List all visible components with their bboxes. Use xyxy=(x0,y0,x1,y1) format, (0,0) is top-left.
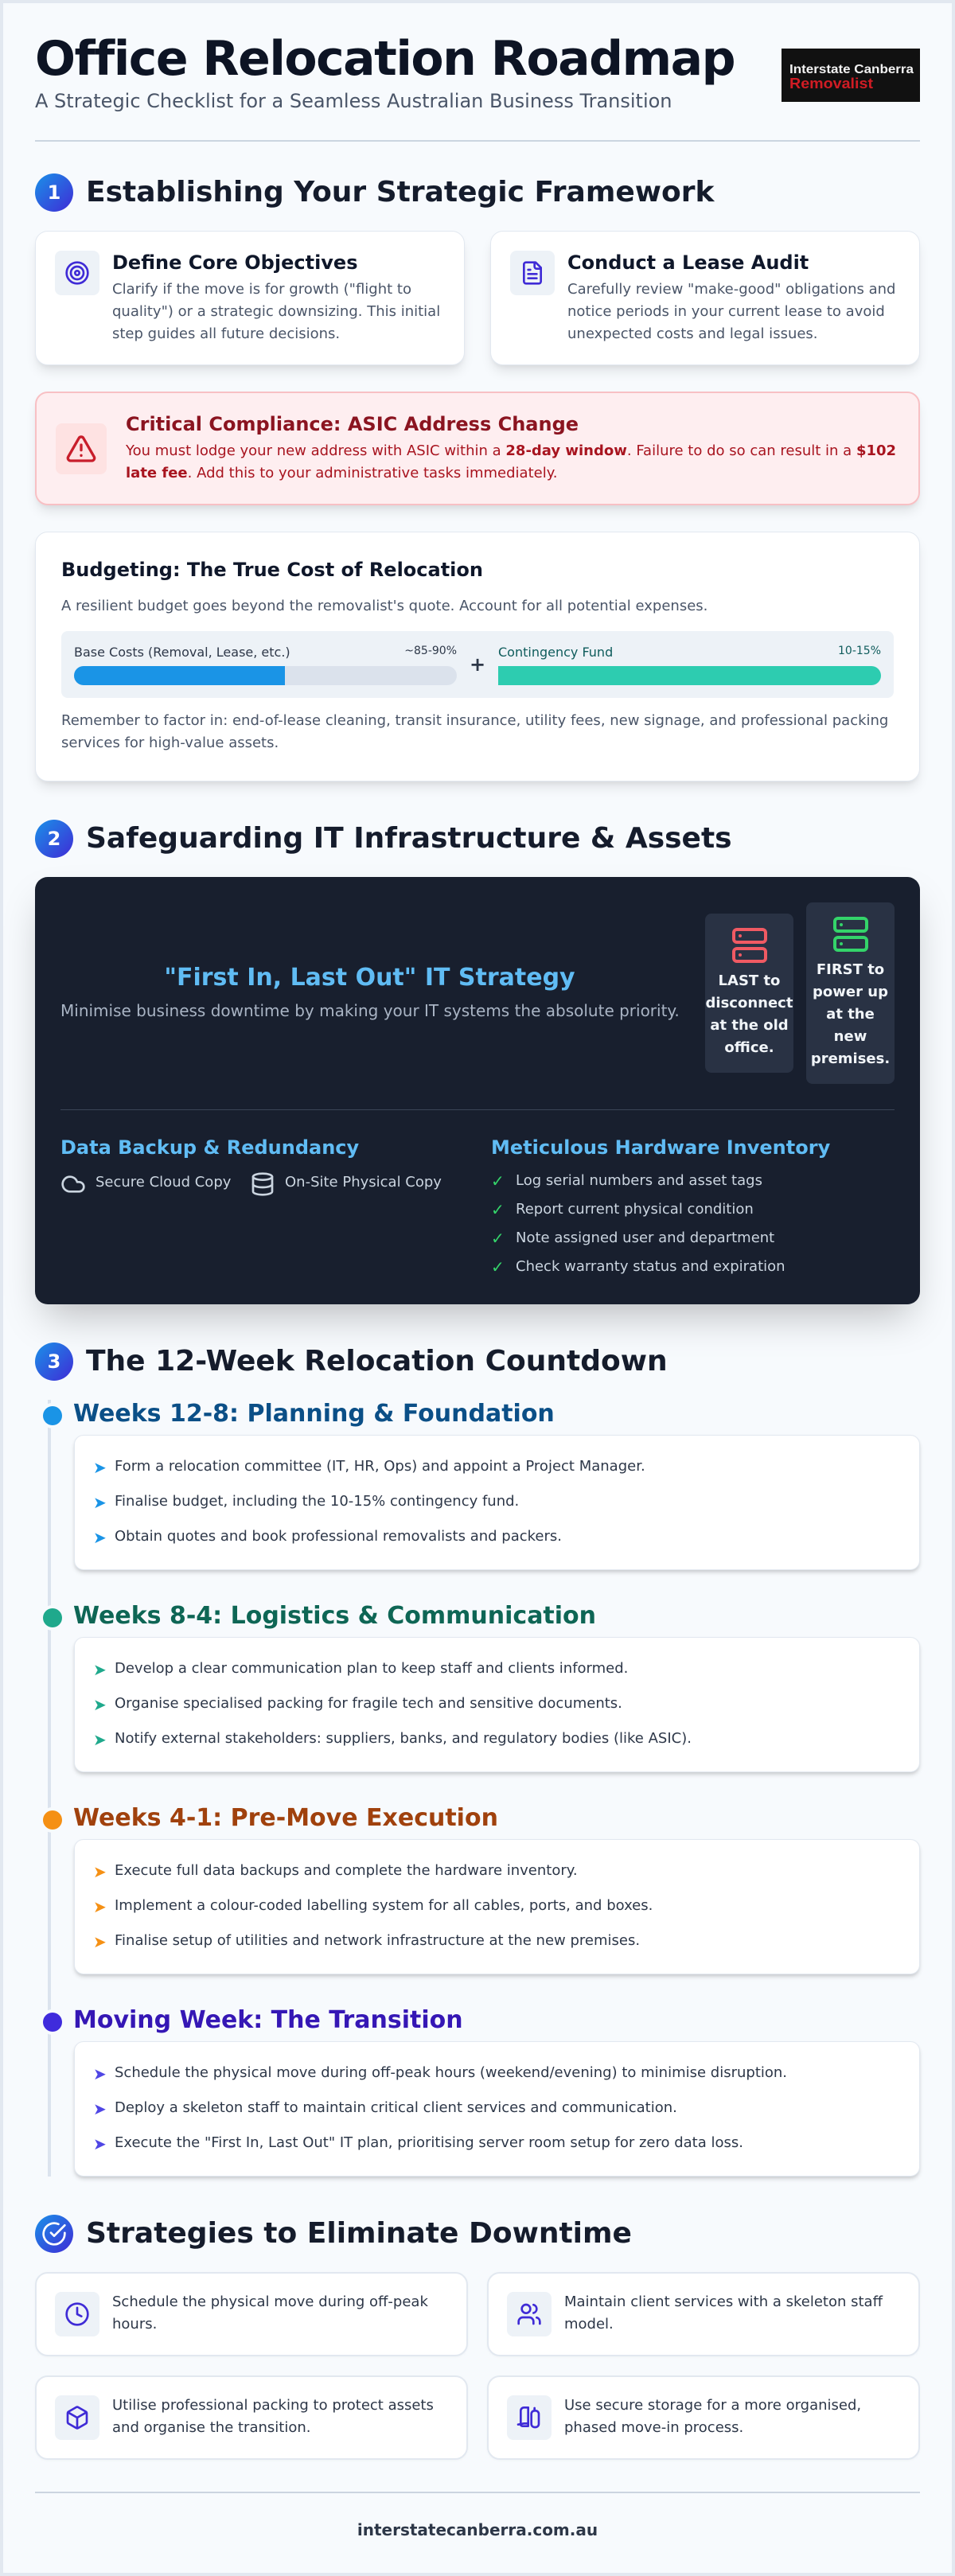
task: Deploy a skeleton staff to maintain critical client services and communication. xyxy=(115,2099,677,2116)
logo: Interstate Canberra xyxy=(789,63,914,76)
alert text xyxy=(126,442,896,481)
phase card xyxy=(74,1839,920,1974)
card text xyxy=(112,281,440,342)
strategy text: and organise the transition. xyxy=(112,2419,310,2436)
strategy card: storage xyxy=(487,2375,920,2460)
contingency value: 10-15% xyxy=(838,645,881,657)
base costs bar xyxy=(74,666,457,685)
card text: Clarify if the move is for growth ("flight to xyxy=(112,281,411,298)
task: Implement a colour-coded labelling system for all cables, ports, and boxes. xyxy=(115,1897,653,1914)
icon: warning xyxy=(56,423,107,474)
badge 3: 3 xyxy=(48,1350,60,1373)
label: cloud copy: Secure Cloud Copy xyxy=(96,1174,231,1191)
timeline dot xyxy=(43,2013,62,2032)
task: Form a relocation committee (IT, HR, Ops) and appoint a Project Manager. xyxy=(115,1458,645,1475)
task: Notify external stakeholders: suppliers, banks, and regulatory bodies (like ASIC). xyxy=(115,1730,692,1747)
panel: define core objectives xyxy=(35,231,465,365)
panel: lease audit xyxy=(490,231,920,365)
title: Office Relocation Roadmap xyxy=(35,31,735,87)
strategy text: hours. xyxy=(112,2316,157,2332)
strategy text: Utilise professional packing to protect assets xyxy=(112,2397,434,2414)
phase: moving week xyxy=(43,2006,922,2180)
label: premises. xyxy=(811,1050,890,1067)
strategy card: skeleton staff xyxy=(487,2272,920,2356)
strategy text xyxy=(112,2293,428,2332)
phase heading: Moving Week: The Transition xyxy=(73,2006,463,2034)
header xyxy=(35,31,920,112)
section heading 4 xyxy=(35,2215,632,2253)
icon: target xyxy=(55,251,99,295)
strategy subtitle: Minimise business downtime by making your IT systems the absolute priority. xyxy=(60,1001,680,1020)
task: ➤ xyxy=(93,1493,107,1512)
card: first to power up xyxy=(806,902,895,1084)
phase card xyxy=(74,1435,920,1570)
item: ✓ xyxy=(491,1229,505,1248)
badge 1: 1 xyxy=(48,181,60,204)
budget note: Remember to factor in: end-of-lease cleaning, transit insurance, utility fees, new signage, and professional packing xyxy=(61,712,888,729)
subtitle: A Strategic Checklist for a Seamless Australian Business Transition xyxy=(35,90,672,112)
strategy text: model. xyxy=(564,2316,614,2332)
strategy text: Schedule the physical move during off-peak xyxy=(112,2293,428,2310)
card text: unexpected costs and legal issues. xyxy=(567,325,818,342)
card title: Conduct a Lease Audit xyxy=(567,251,809,274)
strategy text xyxy=(112,2395,434,2439)
section heading 2 xyxy=(35,820,732,858)
heading text: Strategies to Eliminate Downtime xyxy=(86,2217,632,2250)
task: Execute full data backups and complete the hardware inventory. xyxy=(115,1862,578,1879)
task: ➤ xyxy=(93,1695,107,1714)
panel: IT strategy xyxy=(35,877,920,1304)
budget title: Budgeting: The True Cost of Relocation xyxy=(61,559,483,581)
contingency bar xyxy=(498,666,881,685)
strategy card: off-peak xyxy=(35,2272,468,2356)
item: Report current physical condition xyxy=(516,1201,754,1218)
budget note: services for high-value assets. xyxy=(61,735,279,751)
task: ➤ xyxy=(93,1862,107,1881)
budget description: A resilient budget goes beyond the removalist's quote. Account for all potential expenses. xyxy=(61,598,707,614)
card text: Carefully review "make-good" obligations and xyxy=(567,281,895,298)
timeline dot xyxy=(43,1608,62,1627)
task: Schedule the physical move during off-peak hours (weekend/evening) to minimise disruption. xyxy=(115,2064,787,2081)
label: LAST to xyxy=(719,972,780,989)
timeline dot xyxy=(43,1406,62,1425)
label xyxy=(811,961,890,1067)
phase card xyxy=(74,1637,920,1772)
alert text: late fee. Add this to your administrative tasks immediately. xyxy=(126,465,558,481)
task: ➤ xyxy=(93,1528,107,1547)
section heading 1 xyxy=(35,173,715,212)
inventory checklist xyxy=(491,1171,785,1276)
icon: box xyxy=(55,2395,99,2440)
label: office. xyxy=(724,1039,774,1056)
phase heading: Weeks 12-8: Planning & Foundation xyxy=(73,1400,555,1428)
icon: document xyxy=(510,251,555,295)
logo xyxy=(782,49,920,102)
phase: weeks 8-4 xyxy=(43,1602,922,1776)
task: Obtain quotes and book professional removalists and packers. xyxy=(115,1528,562,1545)
alert text: You must lodge your new address with ASIC within a 28-day window. Failure to do so can result in a $102 xyxy=(126,442,896,459)
alert title: Critical Compliance: ASIC Address Change xyxy=(126,413,579,435)
strategy text: Maintain client services with a skeleton staff xyxy=(564,2293,883,2310)
heading text: The 12-Week Relocation Countdown xyxy=(86,1345,668,1378)
label: new xyxy=(834,1028,867,1045)
item: Note assigned user and department xyxy=(516,1230,774,1246)
label: physical copy: On-Site Physical Copy xyxy=(285,1174,442,1191)
task: ➤ xyxy=(93,1730,107,1749)
badge 3 xyxy=(35,1343,73,1381)
badge 2 xyxy=(35,820,73,858)
label: at the xyxy=(826,1006,875,1023)
strategy title: "First In, Last Out" IT Strategy xyxy=(164,964,575,992)
label: at the old xyxy=(710,1017,789,1034)
task: ➤ xyxy=(93,2134,107,2153)
heading text: Safeguarding IT Infrastructure & Assets xyxy=(86,822,732,855)
badge 1 xyxy=(35,173,73,212)
phase card xyxy=(74,2041,920,2177)
hardware inventory heading: Meticulous Hardware Inventory xyxy=(491,1136,830,1159)
contingency label: Contingency Fund xyxy=(498,645,613,660)
panel: compliance alert xyxy=(35,392,920,505)
strategy text: phased move-in process. xyxy=(564,2419,743,2436)
label xyxy=(706,972,793,1056)
task: ➤ xyxy=(93,1897,107,1916)
badge: check xyxy=(35,2215,73,2253)
label: FIRST to xyxy=(817,961,884,978)
label: power up xyxy=(813,984,888,1000)
strategy text: Use secure storage for a more organised, xyxy=(564,2397,861,2414)
card text: step guides all future decisions. xyxy=(112,325,340,342)
task: Execute the "First In, Last Out" IT plan, prioritising server room setup for zero data loss. xyxy=(115,2134,743,2151)
task: Develop a clear communication plan to keep staff and clients informed. xyxy=(115,1660,628,1677)
strategy text xyxy=(564,2293,883,2332)
item: ✓ xyxy=(491,1171,505,1191)
item: ✓ xyxy=(491,1200,505,1219)
card title: Define Core Objectives xyxy=(112,251,358,274)
badge 2: 2 xyxy=(48,828,60,850)
icon: storage xyxy=(507,2395,552,2440)
strategy card: packing xyxy=(35,2375,468,2460)
card: last to disconnect xyxy=(705,914,793,1073)
data backup heading: Data Backup & Redundancy xyxy=(60,1136,359,1159)
icon: clock xyxy=(55,2292,99,2336)
phase: weeks 4-1 xyxy=(43,1804,922,1978)
backup options xyxy=(61,1172,442,1196)
task: ➤ xyxy=(93,2064,107,2083)
card text: notice periods in your current lease to avoid xyxy=(567,303,885,320)
icon: database xyxy=(251,1172,274,1196)
card text: quality") or a strategic downsizing. This initial xyxy=(112,303,440,320)
icon: red server xyxy=(732,928,767,963)
phase heading: Weeks 8-4: Logistics & Communication xyxy=(73,1602,596,1630)
card text xyxy=(567,281,895,342)
phase: weeks 12-8 xyxy=(43,1400,922,1574)
base costs value: ~85-90% xyxy=(404,645,457,657)
icon: cloud xyxy=(61,1175,85,1193)
budget note xyxy=(61,712,888,751)
task: ➤ xyxy=(93,1458,107,1477)
base costs label: Base Costs (Removal, Lease, etc.) xyxy=(74,645,290,660)
item: Check warranty status and expiration xyxy=(516,1258,785,1275)
item: Log serial numbers and asset tags xyxy=(516,1172,762,1189)
logo: Removalist xyxy=(789,76,873,92)
task: ➤ xyxy=(93,2099,107,2118)
item: ✓ xyxy=(491,1257,505,1276)
footer url: interstatecanberra.com.au xyxy=(357,2520,598,2539)
timeline dot xyxy=(43,1810,62,1830)
icon: green server xyxy=(833,917,868,952)
panel: budgeting xyxy=(35,532,920,781)
task: ➤ xyxy=(93,1660,107,1679)
heading text: Establishing Your Strategic Framework xyxy=(86,176,714,208)
budget chart xyxy=(61,631,894,698)
task: Finalise setup of utilities and network infrastructure at the new premises. xyxy=(115,1932,640,1949)
task: ➤ xyxy=(93,1932,107,1951)
label: disconnect xyxy=(706,995,793,1011)
icon: users xyxy=(507,2292,552,2336)
task: Organise specialised packing for fragile tech and sensitive documents. xyxy=(115,1695,622,1712)
strategy text xyxy=(564,2395,861,2439)
phase heading: Weeks 4-1: Pre-Move Execution xyxy=(73,1804,498,1832)
section heading 3 xyxy=(35,1343,668,1381)
task: Finalise budget, including the 10-15% contingency fund. xyxy=(115,1493,519,1510)
plus sign: + xyxy=(470,653,485,676)
